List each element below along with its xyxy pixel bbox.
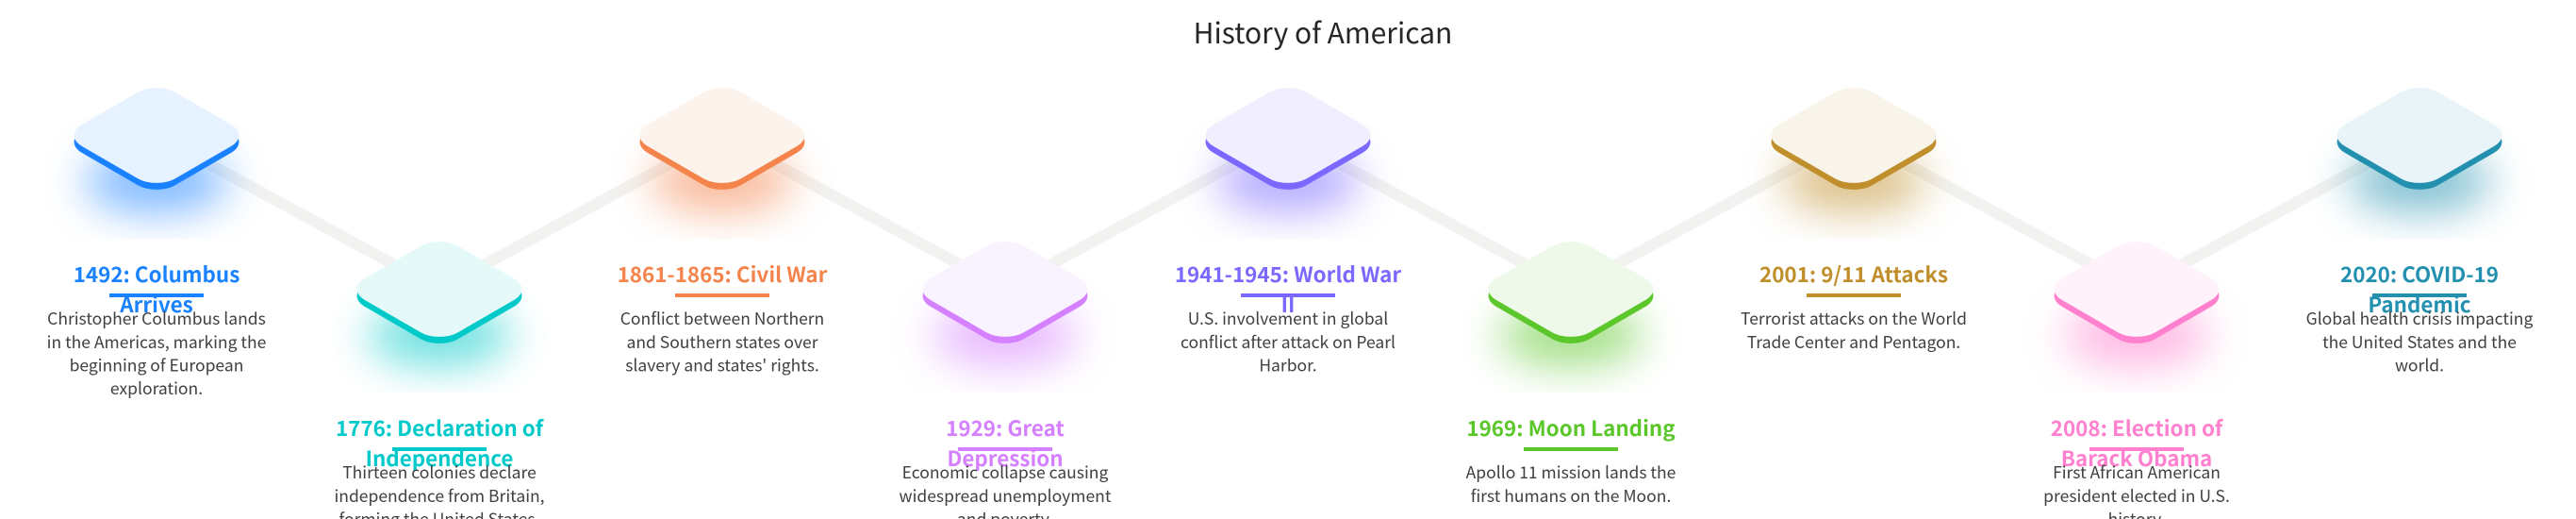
milestone: 2008 Election of Barack Obama: [2043, 235, 2230, 519]
heading: 2001: 9/11 Attacks: [1759, 259, 1948, 289]
heading: 1776: Declaration of: [336, 412, 545, 443]
underline: [2089, 447, 2184, 451]
description: in the Americas, marking the: [47, 330, 266, 354]
underline: [1524, 447, 1618, 451]
description: U.S. involvement in global: [1188, 307, 1388, 330]
heading: 1941-1945: World War: [1175, 259, 1401, 289]
description: and Southern states over: [626, 330, 818, 354]
underline: [1807, 293, 1901, 297]
timeline connector: [157, 136, 2419, 289]
heading: 2008: Election of: [2051, 412, 2224, 443]
milestone: 1969 Moon Landing: [1466, 235, 1676, 508]
description: Apollo 11 mission lands the: [1466, 460, 1676, 484]
description: beginning of European: [70, 353, 243, 377]
description: Terrorist attacks on the World: [1741, 307, 1967, 330]
description: independence from Britain,: [334, 484, 545, 508]
heading: II: [1281, 289, 1295, 319]
heading: 1969: Moon Landing: [1466, 412, 1676, 443]
icon: blue diamond: [63, 81, 250, 213]
milestone: 1941-1945 World War II: [1175, 81, 1401, 377]
heading: 1861-1865: Civil War: [618, 259, 828, 289]
underline: [2372, 293, 2467, 297]
icon: green diamond: [1478, 235, 1664, 367]
milestone: 2001 9/11 Attacks: [1741, 81, 1967, 354]
description: world.: [2395, 353, 2444, 377]
heading: Barack Obama: [2061, 443, 2212, 473]
milestone: 1861-1865 Civil War: [618, 81, 828, 377]
description: slavery and states' rights.: [625, 353, 819, 377]
underline: [392, 447, 487, 451]
heading: Pandemic: [2368, 289, 2471, 319]
description: Trade Center and Pentagon.: [1747, 330, 1960, 354]
description: Economic collapse causing: [902, 460, 1108, 484]
heading: 2020: COVID-19: [2340, 259, 2499, 289]
icon: gold diamond: [1760, 81, 1947, 213]
description: the United States and the: [2322, 330, 2517, 354]
description: president elected in U.S.: [2043, 484, 2230, 508]
icon: cerulean diamond: [2326, 81, 2513, 213]
underline: [675, 293, 769, 297]
heading: 1492: Columbus: [74, 259, 239, 289]
underline: [109, 293, 204, 297]
icon: orange diamond: [629, 81, 816, 213]
description: Global health crisis impacting: [2306, 307, 2533, 330]
description: Thirteen colonies declare: [342, 460, 537, 484]
heading: Depression: [947, 443, 1064, 473]
milestone: 1929 Great Depression: [900, 235, 1112, 519]
milestone: 2020 COVID-19 Pandemic: [2306, 81, 2533, 377]
heading: 1929: Great: [946, 412, 1065, 443]
icon: teal diamond: [346, 235, 533, 367]
icon: indigo diamond: [1195, 81, 1381, 213]
description: exploration.: [110, 377, 203, 400]
heading: Independence: [366, 443, 513, 473]
description: Christopher Columbus lands: [47, 307, 266, 330]
underline: [958, 447, 1052, 451]
title: History of American: [1194, 10, 1452, 52]
description: Harbor.: [1259, 353, 1317, 377]
description: Conflict between Northern: [620, 307, 824, 330]
icon: pink diamond: [2043, 235, 2230, 367]
description: first humans on the Moon.: [1471, 484, 1671, 508]
description: widespread unemployment: [900, 484, 1112, 508]
milestone: 1776 Declaration of Independence: [334, 235, 545, 519]
icon: violet diamond: [912, 235, 1098, 367]
heading: Arrives: [119, 289, 193, 319]
underline: [1241, 293, 1335, 297]
description: conflict after attack on Pearl: [1181, 330, 1395, 354]
milestone: 1492 Columbus Arrives: [47, 81, 266, 400]
description: First African American: [2053, 460, 2221, 484]
